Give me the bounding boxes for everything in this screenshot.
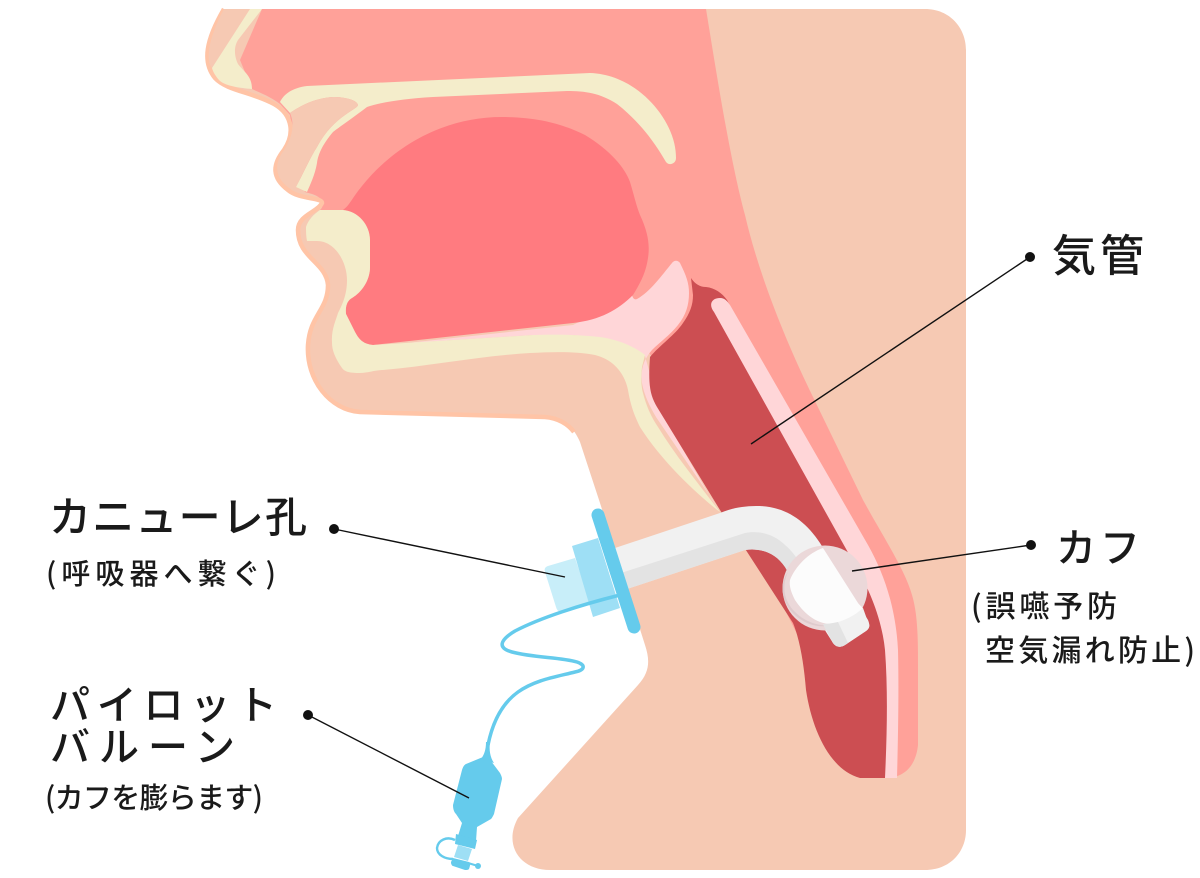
- label: pilot balloon: パイロット: [50, 673, 277, 731]
- nose cartilage skin: [209, 9, 250, 68]
- cannula tube: [612, 506, 869, 647]
- note: cuff purpose: 空気漏れ防止): [985, 626, 1195, 670]
- pilot balloon assembly: [437, 595, 620, 870]
- light pink pharynx: [407, 261, 718, 508]
- outer connector: [545, 558, 590, 611]
- inflation line: [488, 595, 620, 745]
- neck taper: [481, 742, 494, 763]
- tongue and oral cavity: [343, 117, 649, 345]
- note: inflates cuff: (カフを膨らます): [45, 775, 263, 817]
- lower jaw bone: [306, 210, 720, 512]
- face outline: [207, 9, 574, 432]
- tube shading: [621, 532, 810, 590]
- nasal bone: [212, 9, 262, 89]
- cannula connector: [545, 515, 634, 627]
- valve loop: [437, 838, 455, 859]
- leader: trachea: [751, 252, 1035, 444]
- head and neck silhouette: [207, 9, 966, 870]
- leader: cannula port: [329, 524, 565, 577]
- valve band: [454, 845, 472, 861]
- note: cuff purpose: (誤嚥予防: [971, 582, 1117, 626]
- label: pilot balloon: [50, 673, 277, 773]
- cuff balloon: [782, 546, 869, 647]
- label: cannula port: カニューレ孔: [49, 484, 307, 545]
- leader: pilot balloon: [303, 710, 469, 798]
- pink soft tissue: [240, 9, 918, 778]
- note: cuff purpose: [971, 582, 1195, 670]
- valve stem and ball: [468, 863, 481, 869]
- cuff shadow: [783, 572, 832, 626]
- lower lip outline patch: [308, 243, 342, 370]
- tube tip: [823, 608, 869, 647]
- posterior tracheal wall stripe: [711, 298, 898, 778]
- cuff sphere: [782, 546, 868, 630]
- tube tip shade: [823, 622, 848, 647]
- valve cap: [451, 858, 470, 870]
- label: pilot balloon: バルーン: [50, 715, 235, 773]
- note: connect to ventilator: (呼吸器へ繋ぐ): [46, 551, 276, 593]
- leader: cuff: [852, 540, 1036, 571]
- balloon body: [453, 755, 502, 841]
- tube body: [612, 506, 869, 647]
- upper jaw bone and hard palate: [280, 73, 676, 192]
- label: cuff: カフ: [1056, 516, 1140, 574]
- upper lip skin: [277, 97, 358, 187]
- valve collar: [455, 834, 477, 849]
- label: trachea: 気管: [1052, 220, 1144, 284]
- cuff inner highlight: [790, 548, 863, 624]
- trachea: [649, 278, 891, 778]
- neck flange: [598, 515, 634, 627]
- inner connector: [572, 538, 620, 617]
